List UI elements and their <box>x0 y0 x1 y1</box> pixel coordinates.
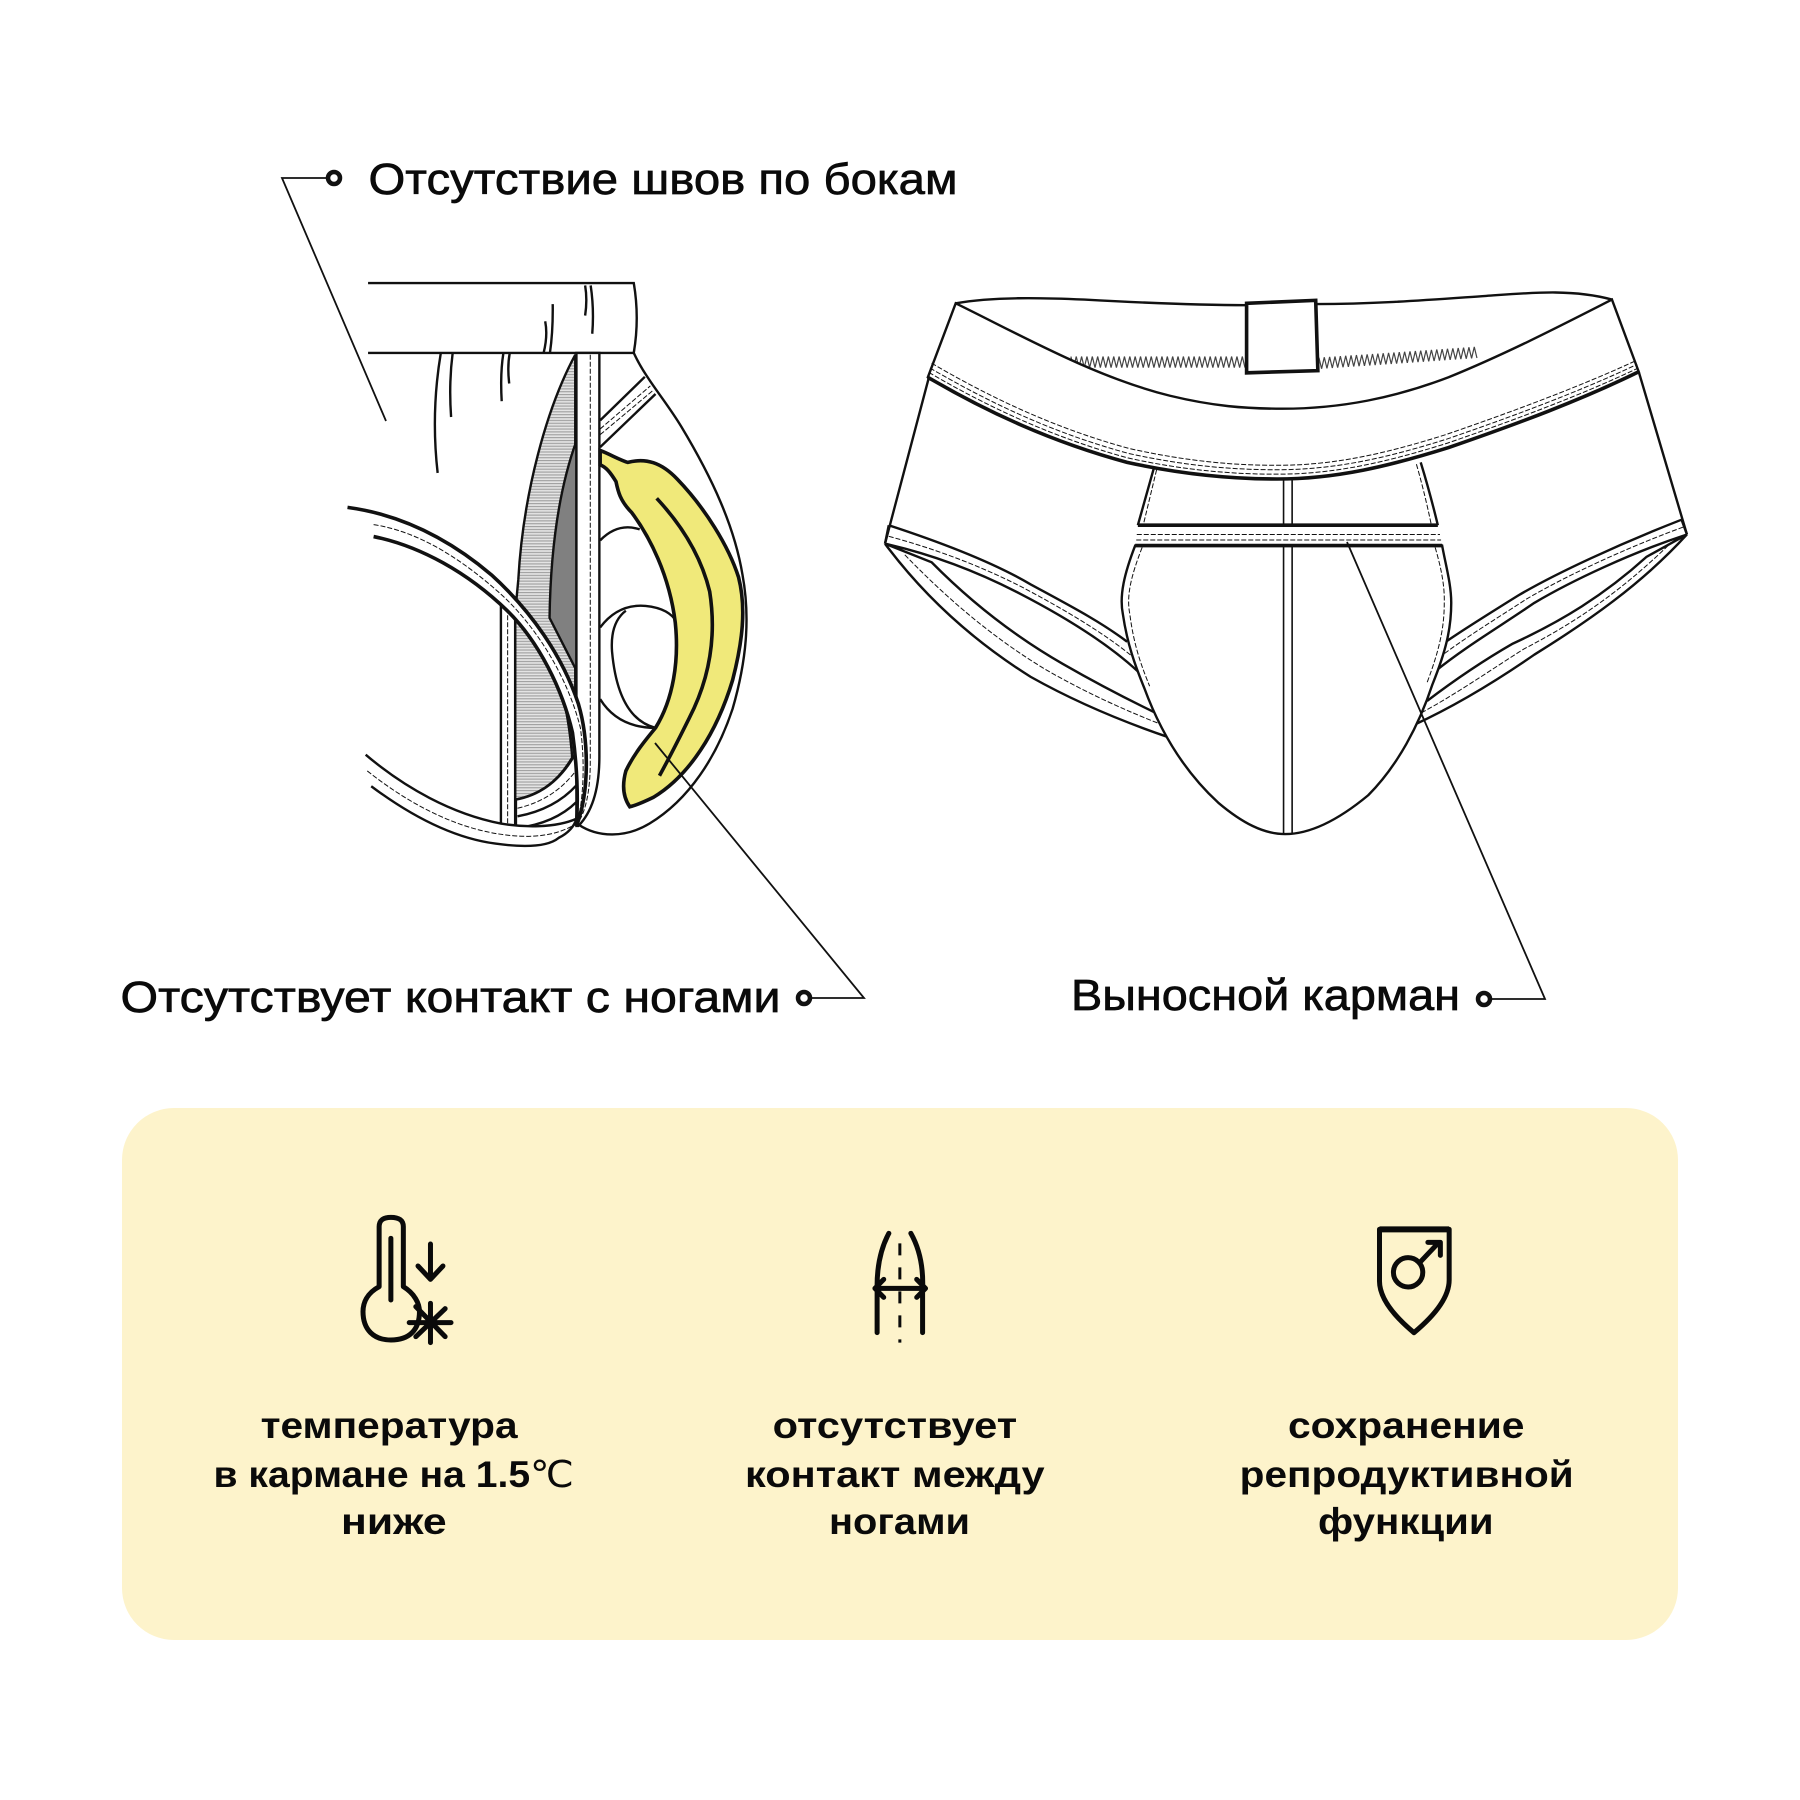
inner pouch rings <box>600 527 677 728</box>
leader line <box>655 743 864 998</box>
pouch strap stitching <box>600 386 653 435</box>
label: Отсутствие швов по бокам <box>368 155 958 204</box>
front vertical strip <box>501 601 515 826</box>
front strip stitching <box>507 608 509 824</box>
text: reproductive function <box>1240 1405 1574 1542</box>
illustration: side view of pouch with banana <box>347 283 747 846</box>
text: reproductive function: функции <box>1318 1501 1494 1542</box>
lower leg band stitching <box>367 771 572 836</box>
pouch strap <box>600 377 656 447</box>
horizontal pouch band stitching <box>1136 534 1441 540</box>
callout: no side seams <box>282 155 958 421</box>
dark sliver <box>559 680 576 761</box>
upper leg band stitching <box>374 525 583 819</box>
icon: shield with male symbol <box>1379 1229 1449 1333</box>
text: no contact between legs: отсутствует <box>773 1405 1017 1446</box>
text: temperature: температура <box>261 1405 518 1446</box>
text: temperature: ниже <box>341 1501 447 1542</box>
horizontal pouch band <box>1135 525 1442 546</box>
lower leg band <box>366 755 576 846</box>
upper leg band <box>347 507 586 826</box>
side seams <box>885 372 1687 544</box>
banana <box>600 450 743 807</box>
text: temperature <box>214 1405 574 1542</box>
pouch outline <box>578 353 747 834</box>
centre strip <box>576 353 599 826</box>
leader dot <box>798 992 810 1004</box>
mesh lining <box>515 355 575 800</box>
upper panel sides <box>1138 462 1438 525</box>
pouch <box>1122 546 1451 834</box>
upper panel stitching <box>1143 464 1431 525</box>
text: no contact between legs: ногами <box>829 1501 970 1542</box>
illustration: front view of briefs <box>885 292 1687 834</box>
leader line <box>282 178 386 421</box>
callout: no contact with legs <box>120 743 864 1022</box>
text: temperature: в кармане на 1.5 ℃ <box>214 1454 574 1495</box>
hanging label <box>1247 300 1318 373</box>
mesh bottom band stitching <box>518 770 576 808</box>
pouch edge stitching <box>1129 547 1444 686</box>
waistband folds <box>435 285 593 473</box>
text: reproductive function: репродуктивной <box>1240 1454 1574 1495</box>
label: Отсутствует контакт с ногами <box>120 973 780 1022</box>
dark inner lining <box>550 441 576 670</box>
right leg band stitching <box>1421 527 1683 713</box>
waistband stitching <box>929 361 1638 474</box>
icon: thermometer <box>363 1217 451 1343</box>
panel background <box>122 1108 1678 1640</box>
callout: outer pocket <box>1071 542 1545 1020</box>
left leg bands <box>885 525 1167 737</box>
leader dot <box>1478 993 1490 1005</box>
icon: distance between legs <box>875 1233 926 1343</box>
text: no contact between legs <box>745 1405 1045 1542</box>
centre strip stitching <box>580 355 590 819</box>
text: no contact between legs: контакт между <box>745 1454 1045 1495</box>
leader line <box>1347 542 1545 999</box>
label: Выносной карман <box>1071 971 1460 1020</box>
banana centre line <box>657 498 712 776</box>
back waistband rim <box>956 292 1612 305</box>
waistband lower edge <box>928 372 1639 479</box>
right leg bands <box>1414 520 1687 725</box>
text: reproductive function: сохранение <box>1288 1405 1524 1446</box>
leader dot <box>328 172 340 184</box>
panel: benefits <box>122 1108 1678 1640</box>
front waistband <box>928 300 1639 479</box>
mesh bottom band lines <box>518 785 576 816</box>
mesh bottom band <box>516 752 576 828</box>
centre seam <box>1284 480 1292 834</box>
waistband <box>368 283 637 353</box>
left leg band stitching <box>889 536 1161 724</box>
zigzag stitching <box>1071 347 1477 369</box>
